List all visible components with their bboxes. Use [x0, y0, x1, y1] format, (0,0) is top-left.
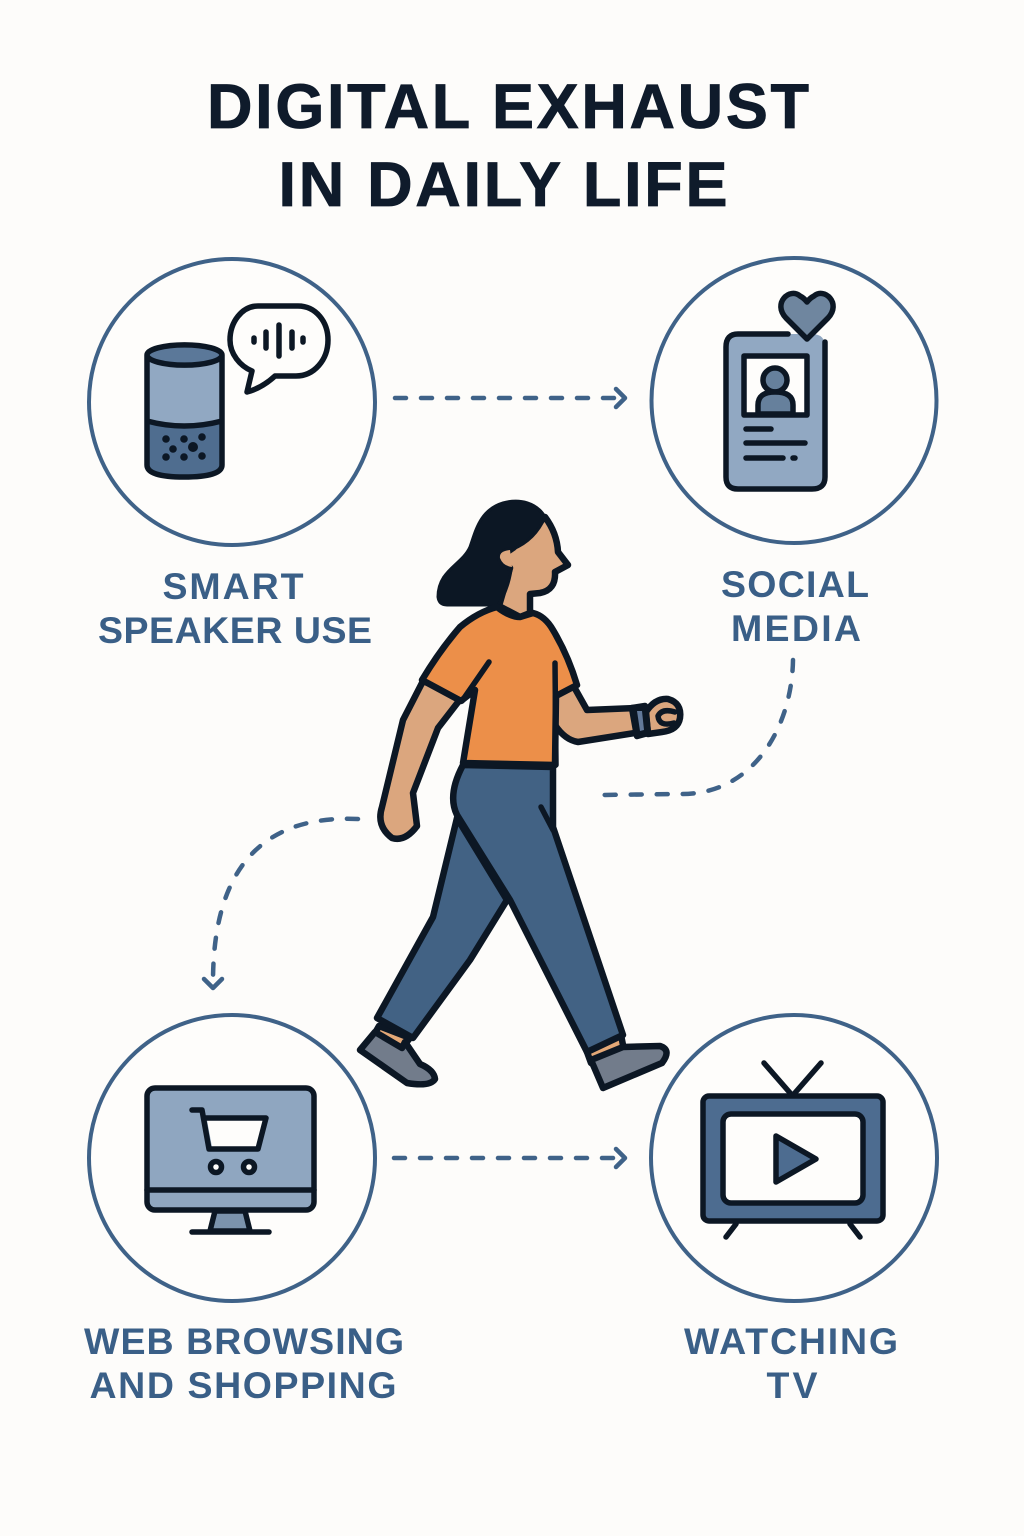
back leg — [377, 818, 507, 1038]
right arm — [555, 685, 641, 742]
hand fist — [646, 699, 680, 734]
arrow: web browsing to watching tv — [394, 1149, 625, 1167]
panel: web browsing and shopping — [84, 1015, 404, 1406]
panel: social media — [652, 258, 936, 649]
ear — [500, 550, 512, 567]
neck and face — [499, 517, 568, 617]
label: watching tv — [684, 1320, 898, 1406]
label: smart speaker use: SPEAKER USE — [98, 609, 372, 651]
arrow: social media to person — [600, 660, 793, 795]
label: smart speaker use: SMART — [162, 565, 304, 607]
icon: speech bubble with sound wave — [230, 306, 328, 392]
arrow: smart speaker to social media — [395, 389, 625, 407]
icon: smart speaker — [147, 345, 222, 477]
label: watching tv: TV — [766, 1364, 818, 1406]
label: web browsing and shopping — [84, 1320, 404, 1406]
front leg and hips — [453, 765, 623, 1052]
hair — [438, 501, 545, 605]
icon: heart — [781, 293, 833, 339]
icon: television — [703, 1063, 883, 1237]
left arm and hand — [380, 681, 462, 839]
icon: social profile card — [726, 334, 825, 489]
label: web browsing and shopping: AND SHOPPING — [90, 1364, 396, 1406]
title — [207, 72, 809, 220]
person walking — [360, 501, 680, 1088]
label: smart speaker use — [98, 565, 372, 651]
title: IN DAILY LIFE — [278, 150, 728, 220]
label: social media: SOCIAL — [721, 563, 869, 605]
right shoe — [587, 1035, 667, 1088]
panel: watching tv — [651, 1015, 937, 1406]
label: watching tv: WATCHING — [684, 1320, 898, 1362]
fist curl — [658, 711, 675, 724]
icon: monitor with shopping cart — [147, 1088, 314, 1232]
panel: smart speaker — [89, 259, 375, 651]
wristband — [632, 706, 648, 736]
arrow: person to web browsing — [204, 819, 358, 988]
label: social media: MEDIA — [731, 607, 861, 649]
orange t-shirt — [422, 607, 577, 765]
label: web browsing and shopping: WEB BROWSING — [84, 1320, 404, 1362]
left shoe — [360, 1026, 435, 1084]
pants crease — [541, 807, 553, 830]
title: DIGITAL EXHAUST — [207, 72, 809, 142]
label: social media — [721, 563, 869, 649]
